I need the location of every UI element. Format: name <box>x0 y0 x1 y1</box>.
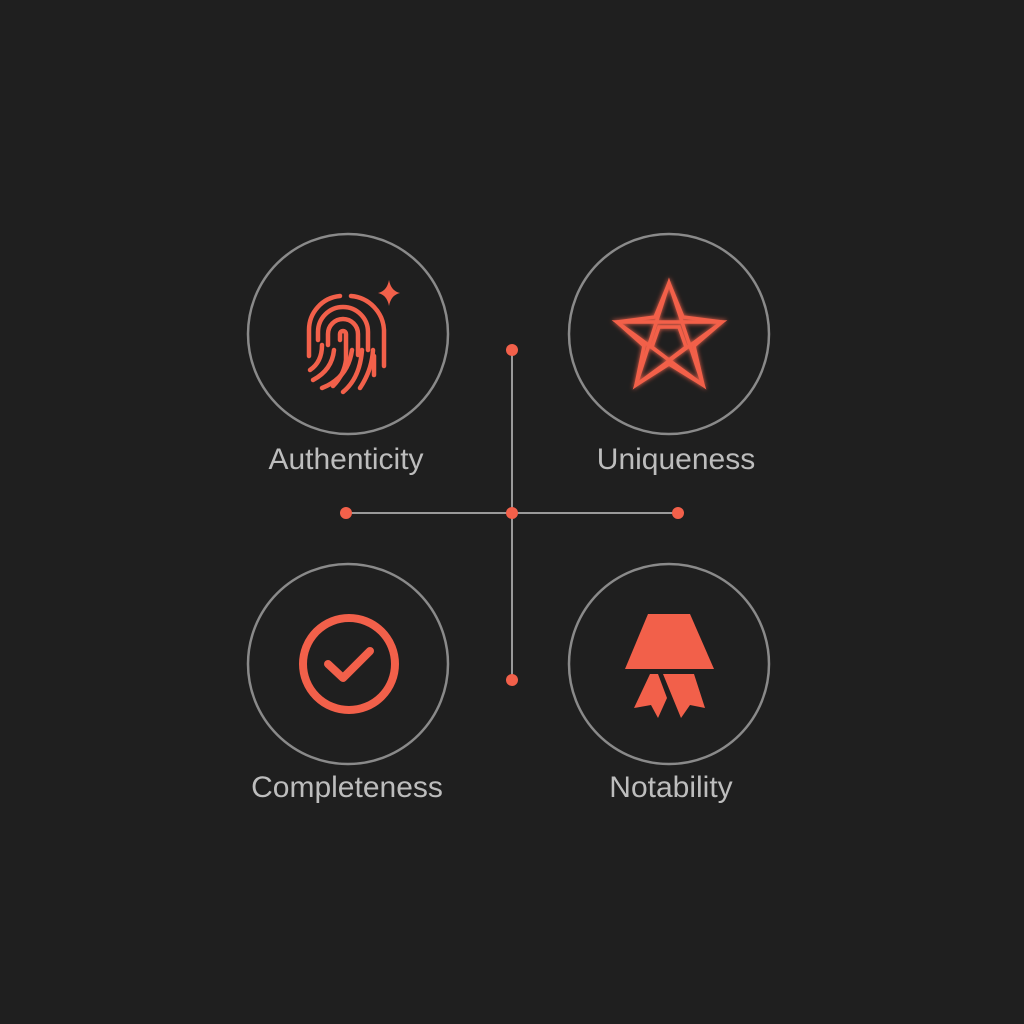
label: Completeness: Completeness <box>251 771 443 804</box>
icon: sparkle <box>378 280 400 306</box>
circles <box>248 234 769 764</box>
icon: fingerprint <box>309 296 384 392</box>
icon: check circle <box>303 618 395 710</box>
label: Notability: Notability <box>609 771 733 804</box>
icon: star <box>617 283 722 385</box>
label: Uniqueness: Uniqueness <box>597 443 755 476</box>
icon: ribbon award <box>625 614 714 718</box>
connector cross <box>340 344 684 686</box>
label: Authenticity: Authenticity <box>268 443 424 476</box>
